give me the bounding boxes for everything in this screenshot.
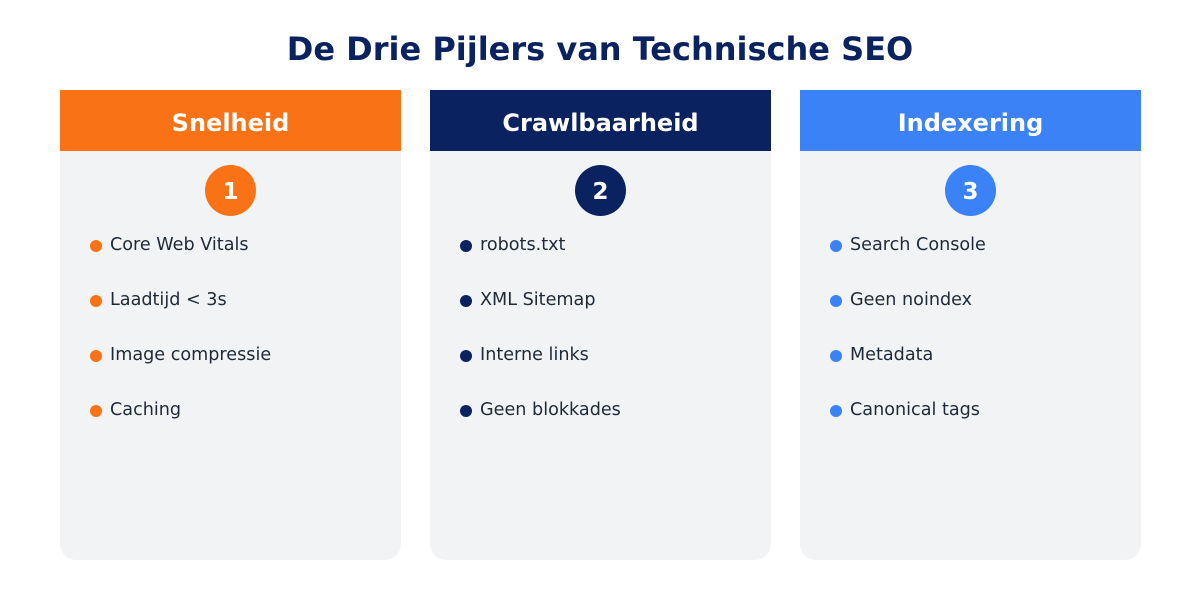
list item: Image compressie (110, 345, 271, 365)
header: Indexering: Indexering (898, 109, 1043, 137)
list item: Interne links (480, 345, 589, 365)
badge 1: 1 (222, 179, 238, 205)
badge 3 (945, 165, 996, 216)
list item: Canonical tags (850, 400, 980, 420)
panel: Crawlbaarheid (430, 90, 771, 560)
list item: Geen blokkades (480, 400, 621, 420)
header: Indexering (800, 90, 1141, 151)
list item: Core Web Vitals (110, 235, 249, 255)
badge 2 (575, 165, 626, 216)
badge 3: 3 (962, 179, 978, 205)
list item: Search Console (850, 235, 986, 255)
list item: Metadata (850, 345, 933, 365)
badge 1 (205, 165, 256, 216)
panel: Snelheid (60, 90, 401, 560)
header: Crawlbaarheid: Crawlbaarheid (502, 109, 699, 137)
list item: XML Sitemap (480, 290, 596, 310)
list item: Laadtijd < 3s (110, 290, 227, 310)
header: Snelheid (60, 90, 401, 151)
header: Snelheid: Snelheid (172, 109, 289, 137)
list item: Caching (110, 400, 181, 420)
list item: Geen noindex (850, 290, 972, 310)
list item: robots.txt (480, 235, 565, 255)
header: Crawlbaarheid (430, 90, 771, 151)
badge 2: 2 (592, 179, 608, 205)
title: De Drie Pijlers van Technische SEO (287, 30, 913, 68)
panel: Indexering (800, 90, 1141, 560)
